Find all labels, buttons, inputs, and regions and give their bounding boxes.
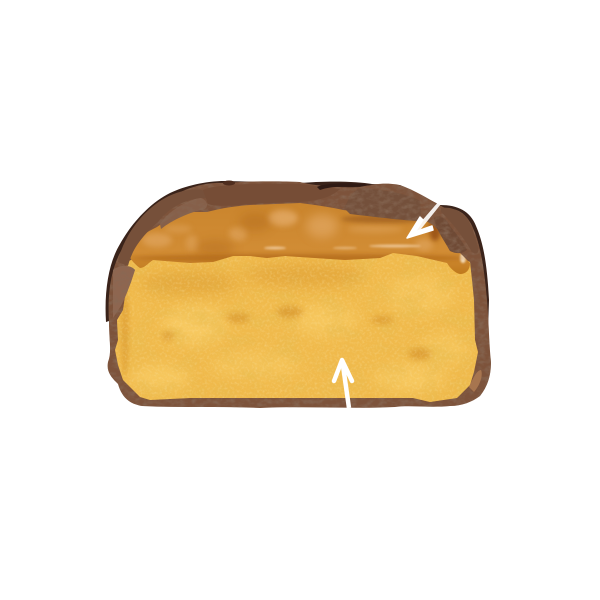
sponge lumps — [117, 266, 472, 402]
chunk: right shoulder — [441, 208, 478, 253]
chunk: top ridge — [203, 184, 340, 206]
sponge lighter patches — [130, 275, 470, 392]
chunk: top left ridge — [118, 190, 207, 266]
chunk: dark top gloss — [317, 183, 372, 190]
illustration: chocolate bar cross-section — [106, 180, 491, 408]
chunk texture — [113, 188, 467, 318]
caramel gloss lines — [264, 244, 466, 263]
chocolate chunks — [113, 180, 482, 392]
dark chocolate outer shell — [106, 181, 489, 330]
caramel layer — [130, 203, 470, 274]
caramel highlights — [142, 210, 433, 251]
arrow: caramel layer — [407, 178, 461, 238]
sponge dimples — [121, 263, 431, 375]
caramel shadows — [130, 213, 470, 262]
arrow: sponge layer — [334, 360, 352, 408]
sponge base — [110, 245, 485, 405]
chunk: small top nub — [223, 180, 235, 186]
milk chocolate coating — [108, 181, 491, 408]
chunk: top right slab — [344, 188, 421, 221]
chunk: right flake — [434, 216, 467, 253]
chocolate coating texture — [108, 181, 491, 408]
sponge grain — [116, 254, 477, 402]
chunk: left flake — [113, 266, 135, 318]
chunk: bottom right foil fold — [469, 370, 482, 392]
caramel base — [130, 203, 470, 274]
sponge filling — [110, 245, 485, 405]
chunk: upper left flake — [160, 198, 207, 229]
